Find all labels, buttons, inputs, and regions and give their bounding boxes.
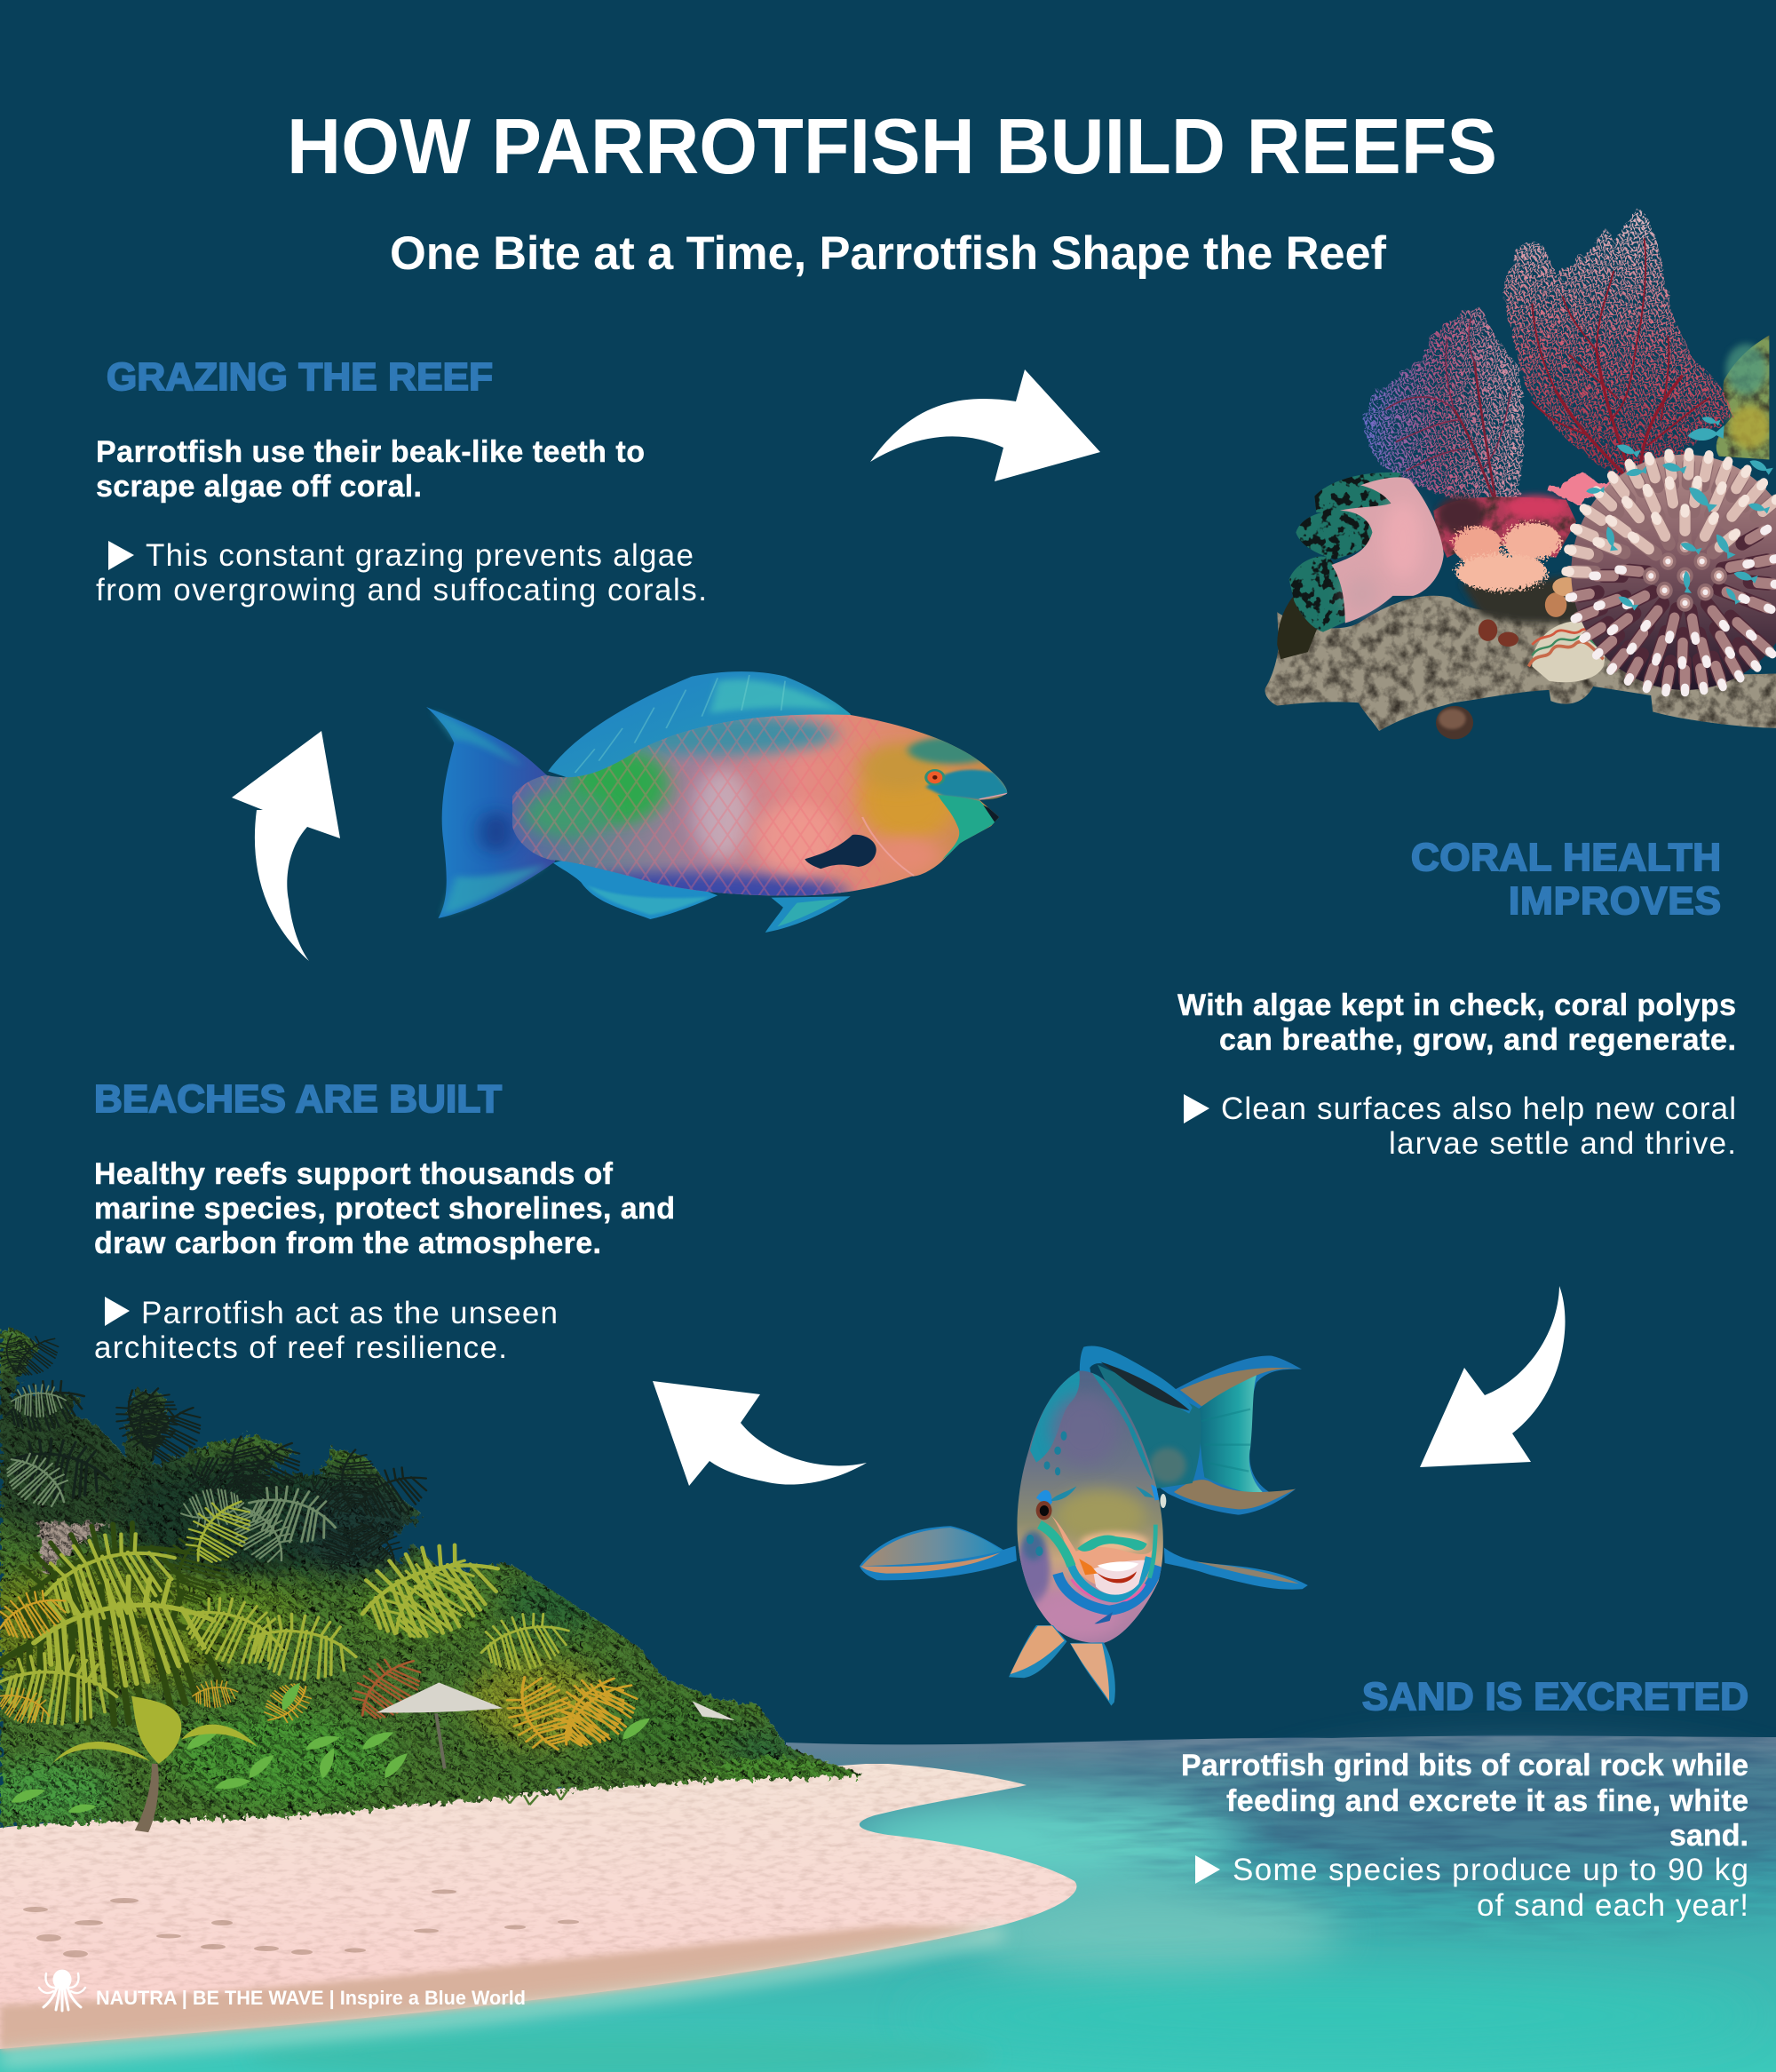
title: HOW PARROTFISH BUILD REEFS (287, 102, 1497, 190)
dorsal fin (548, 671, 851, 784)
shrub leaves (9, 1680, 654, 1814)
small palm (52, 1696, 258, 1832)
left sea fan (1362, 308, 1524, 507)
right mossy rock (1717, 333, 1773, 460)
arrow: grazing to coral (870, 369, 1100, 481)
golden fronds (0, 1581, 653, 1759)
giant clam (1289, 472, 1444, 632)
illustration: lagoon sea (0, 1735, 1776, 2072)
gill line (862, 817, 914, 876)
text: coral health body: can breathe, grow, and regenerate. (1219, 1023, 1736, 1057)
ventral fins (1009, 1625, 1115, 1706)
illustration: island vegetation (0, 1314, 878, 1837)
pale mid palms (0, 1383, 344, 1572)
chin bands (1058, 1566, 1159, 1610)
text: brand line: NAUTRA | BE THE WAVE | Inspire a Blue World (96, 1987, 526, 2009)
peach cheek (1051, 1516, 1153, 1589)
text: sand body: sand. (1669, 1819, 1748, 1853)
text: beaches body: Parrotfish act as the unseen (141, 1296, 558, 1330)
heading: coral health: IMPROVES (1509, 879, 1721, 923)
heading: coral health (1411, 836, 1721, 923)
text: coral health body: larvae settle and thrive. (1389, 1126, 1736, 1161)
tail fin (1149, 1356, 1302, 1515)
rock base (1265, 596, 1776, 731)
thatched roof (40, 1522, 107, 1573)
dorsal fin (1080, 1346, 1193, 1414)
subtitle: One Bite at a Time, Parrotfish Shape the Reef (390, 227, 1387, 280)
left eye (1036, 1501, 1052, 1520)
footer brand (39, 1970, 526, 2011)
text: sand body: of sand each year! (1477, 1888, 1748, 1923)
right sea fan (1503, 210, 1732, 481)
tail fin (426, 707, 555, 918)
heading: coral health: CORAL HEALTH (1411, 836, 1721, 879)
small shells (1479, 577, 1580, 647)
panel: beaches are built (94, 1077, 675, 1365)
text: coral health body: Clean surfaces also help new coral (1221, 1092, 1736, 1126)
text: beaches body: draw carbon from the atmosphere. (94, 1227, 601, 1260)
umbrellas (377, 1683, 735, 1768)
arrow: fish to grazing (232, 731, 340, 961)
text: coral health body (1177, 988, 1736, 1161)
body (512, 714, 1007, 895)
illustration: parrotfish front view (860, 1346, 1308, 1706)
text: grazing body (96, 435, 707, 607)
fan main branches (1386, 239, 1709, 504)
back of body (1098, 1365, 1201, 1489)
text: grazing body: This constant grazing prevents algae (146, 538, 694, 573)
mouth (1093, 1560, 1145, 1595)
body (1018, 1371, 1163, 1643)
right eye (1160, 1494, 1166, 1508)
foliage canopy (0, 1314, 878, 1837)
text: sand body: Parrotfish grind bits of coral rock while (1181, 1749, 1748, 1782)
striped small clam (1528, 621, 1605, 682)
text: grazing body: from overgrowing and suffocating corals. (96, 573, 707, 607)
text: sand body: Some species produce up to 90 kg (1233, 1853, 1748, 1887)
heading: sand: SAND IS EXCRETED (1362, 1675, 1748, 1719)
small teal fish (1586, 415, 1773, 611)
right pectoral fin (1164, 1548, 1308, 1590)
text: beaches body: marine species, protect shorelines, and (94, 1192, 675, 1226)
anal fin (553, 859, 718, 919)
text: beaches body: architects of reef resilience. (94, 1330, 507, 1365)
staghorn coral (1566, 415, 1776, 692)
icon: octopus (39, 1970, 85, 2011)
illustration: coral reef (1265, 210, 1776, 739)
sunlit palms (0, 1500, 246, 1737)
heading: grazing: GRAZING THE REEF (107, 355, 493, 399)
text: grazing body: scrape algae off coral. (96, 470, 422, 504)
text: sand body: feeding and excrete it as fine, white (1226, 1784, 1748, 1818)
panel: coral health improves (1177, 836, 1736, 1161)
eye (924, 769, 945, 786)
dry frond (342, 1646, 434, 1730)
reddish coral mass (1433, 496, 1576, 558)
dark crevice (1461, 572, 1604, 623)
text: beaches body (94, 1157, 675, 1365)
footprints (23, 1890, 579, 1957)
left pectoral fin (860, 1526, 1017, 1580)
arrow: coral to sand (1420, 1286, 1566, 1467)
brow band (1077, 1535, 1147, 1552)
panel: sand is excreted (1181, 1675, 1748, 1923)
spots (1027, 1431, 1066, 1556)
eye patches (1036, 1490, 1052, 1507)
text: coral health body: With algae kept in check, coral polyps (1177, 988, 1736, 1022)
panel: grazing the reef (96, 355, 707, 607)
illustration: sand beach (0, 1764, 1076, 2059)
text: sand body (1181, 1749, 1748, 1923)
heading: beaches: BEACHES ARE BUILT (94, 1077, 502, 1121)
pectoral fin (805, 835, 876, 869)
dark palm crowns (0, 1328, 438, 1576)
ventral fin (765, 896, 851, 933)
text: grazing body: Parrotfish use their beak-like teeth to (96, 435, 645, 469)
seedlings on sand (456, 1785, 569, 1805)
cowrie shell (1436, 706, 1473, 739)
text: beaches body: Healthy reefs support thousands of (94, 1157, 614, 1191)
pink finger corals (1454, 522, 1561, 591)
arrow: beach from sand (653, 1381, 867, 1486)
illustration: parrotfish side view (426, 671, 1019, 933)
